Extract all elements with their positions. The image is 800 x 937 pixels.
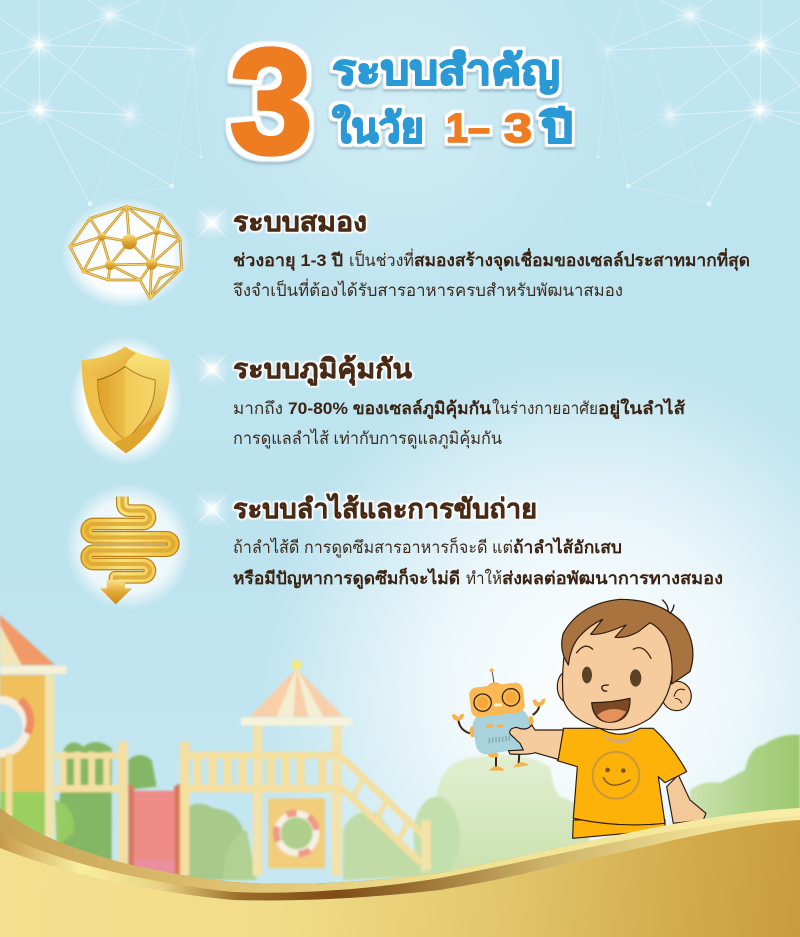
body text: brain: ช่วงอายุ 1-3 ปี <box>233 250 343 271</box>
left fence <box>55 742 127 872</box>
body text: immune: ในร่างกายอาศัย <box>492 398 598 418</box>
body text: brain: เป็นช่วงที่ <box>349 248 414 270</box>
sparkle <box>193 490 231 528</box>
sparkle <box>193 204 231 242</box>
eyes and brows <box>582 667 592 683</box>
icon: golden shield <box>69 335 183 465</box>
boy with toy robot <box>452 599 706 838</box>
central pale tree <box>413 755 593 880</box>
body text: intestine: ถ้าลำไส้ดี การดูดซึมสารอาหารก็จะดี แต่ <box>233 536 513 558</box>
climbing stairs <box>342 757 427 863</box>
icon: golden brain <box>61 198 191 308</box>
heading: brain: ระบบสมอง <box>233 207 367 237</box>
right side trees <box>687 735 800 867</box>
highlight rim of wave <box>0 808 800 893</box>
body text: immune: การดูแลลำไส้ เท่ากับการดูแลภูมิคุ้มกัน <box>233 428 502 449</box>
network pattern: top left <box>0 0 220 206</box>
near bushes <box>55 742 460 880</box>
body text: immune: มากถึง <box>233 399 283 418</box>
body text: intestine <box>233 536 723 590</box>
title <box>229 17 573 185</box>
title line 2 <box>332 104 573 151</box>
hair <box>562 599 693 684</box>
center fence <box>180 742 342 875</box>
title line 2: ในวัย <box>332 104 424 151</box>
life ring panel <box>268 798 325 868</box>
body text: brain: สมองสร้างจุดเชื่อมของเซลล์ประสาทมากที่สุด <box>414 248 750 271</box>
title line 2: 1– <box>446 105 490 151</box>
boy head <box>557 599 693 730</box>
playground background scene <box>0 615 800 880</box>
panel: immune system <box>69 335 686 465</box>
boy arm holding robot <box>508 725 563 759</box>
title line 2: 3 <box>504 105 532 151</box>
title line 1: ระบบสำคัญ <box>332 47 560 94</box>
body text: immune: 70-80% ของเซลล์ภูมิคุ้มกัน <box>288 398 491 420</box>
gold wave footer <box>0 808 800 937</box>
body text: brain: จึงจำเป็นที่ต้องได้รับสารอาหารครบสำหรับพัฒนาสมอง <box>233 278 623 300</box>
body text: intestine: หรือมีปัญหาการดูดซึมก็จะไม่ดี <box>233 566 460 590</box>
panel: brain system <box>61 198 750 308</box>
smiling mouth <box>592 698 630 722</box>
icon: golden intestine <box>65 483 192 610</box>
body text: brain <box>233 248 750 300</box>
body text: immune: อยู่ในลำไส้ <box>598 398 686 420</box>
toy robot <box>452 668 545 770</box>
heading: immune: ระบบภูมิคุ้มกัน <box>233 354 413 386</box>
panel: intestine and excretion system <box>65 483 723 610</box>
heading: intestine: ระบบลำไส้และการขับถ่าย <box>233 493 537 524</box>
sparkle <box>193 350 231 388</box>
center tower <box>250 668 343 717</box>
left tower <box>0 675 45 792</box>
title line 2: ปี <box>539 105 573 151</box>
big number 3: 3 <box>229 17 313 185</box>
body text: immune <box>233 398 686 449</box>
slide <box>128 783 180 880</box>
body text: intestine: ทำให้ <box>466 568 502 588</box>
body text: intestine: ถ้าลำไส้อักเสบ <box>513 537 622 557</box>
network pattern: top right <box>580 0 800 206</box>
body text: intestine: ส่งผลต่อพัฒนาการทางสมอง <box>502 569 723 588</box>
boy body with shirt <box>557 728 706 838</box>
rim of wave <box>0 808 800 901</box>
